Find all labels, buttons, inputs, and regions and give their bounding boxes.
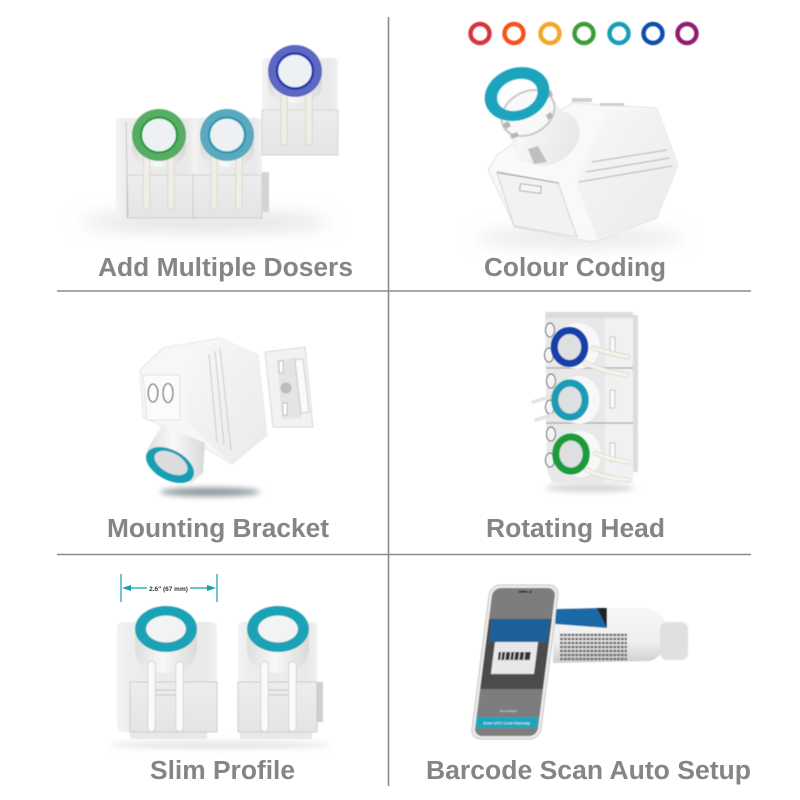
panel: barcode scan — [426, 585, 751, 785]
wall bracket — [265, 347, 313, 427]
dimension marker: 2.6" (67 mm) — [149, 586, 188, 593]
barcode label — [491, 642, 538, 674]
heads — [556, 323, 628, 480]
phone — [471, 585, 559, 739]
head with teal ring — [140, 425, 205, 490]
stacked body — [544, 312, 638, 485]
label: Barcode Scan Auto Setup — [426, 757, 751, 785]
tubes behind teal head — [533, 395, 558, 420]
phone: Enter UPC Code Manually — [483, 721, 530, 725]
phone: Not working? — [499, 709, 518, 713]
slim doser right — [238, 606, 323, 739]
teal ring — [477, 58, 557, 130]
label: Colour Coding — [484, 254, 666, 282]
rings — [554, 330, 586, 471]
doser unit: blue — [262, 45, 338, 155]
product tube — [553, 608, 688, 663]
label: Rotating Head — [486, 515, 665, 543]
hexagonal doser body — [488, 98, 678, 242]
panel: add multiple dosers — [80, 45, 353, 282]
colour rings — [470, 24, 696, 43]
panel: rotating head — [486, 312, 665, 543]
label: Mounting Bracket — [107, 515, 330, 543]
label: Slim Profile — [150, 757, 295, 785]
head cylinder — [493, 81, 590, 177]
dimension marker — [121, 574, 217, 602]
slim doser left — [117, 606, 217, 739]
doser unit: teal — [193, 109, 269, 218]
doser unit: green — [116, 109, 195, 218]
panel: colour coding — [470, 24, 696, 282]
label: Add Multiple Dosers — [98, 254, 353, 282]
panel: slim profile — [110, 574, 330, 785]
panel: mounting bracket — [107, 338, 330, 543]
hex doser — [140, 338, 267, 464]
